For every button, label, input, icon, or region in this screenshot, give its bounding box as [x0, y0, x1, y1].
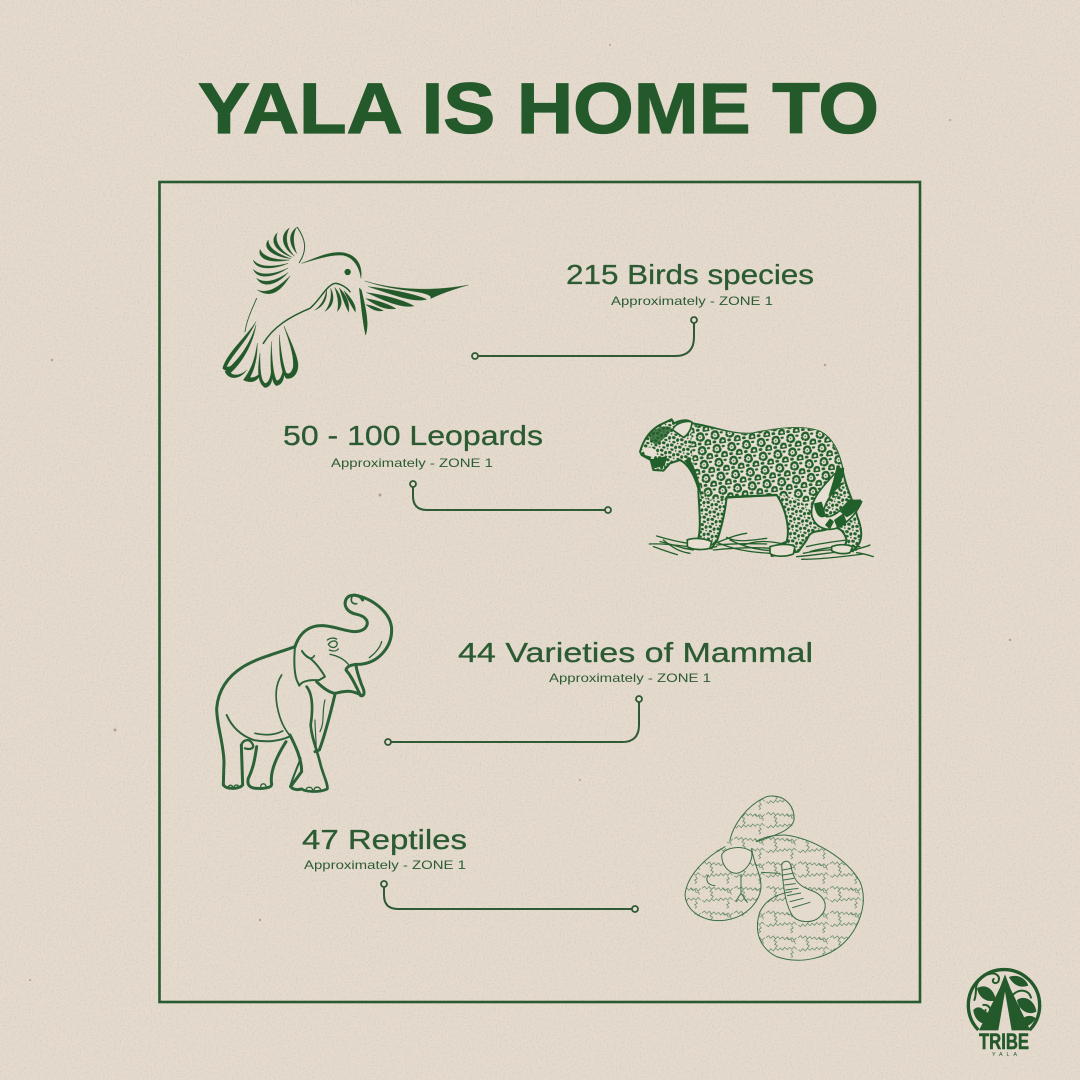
snake tongue and rattle — [736, 868, 810, 908]
head and back — [302, 252, 361, 278]
connector: mammals — [385, 696, 642, 745]
back legs — [241, 740, 253, 749]
grass — [649, 533, 873, 559]
lower wing — [263, 283, 350, 343]
leopard rosettes — [691, 425, 844, 514]
label: birds — [566, 259, 814, 308]
leopard ear — [673, 421, 692, 437]
label: mammals — [458, 637, 813, 685]
leopard torso — [691, 425, 844, 513]
chest folds — [315, 700, 325, 752]
label: leopards — [283, 420, 543, 470]
leopard base silhouette — [640, 419, 861, 556]
leopard head markings — [642, 426, 672, 468]
upper wing feathers — [253, 227, 297, 294]
mammals count: 44 Varieties of Mammal — [458, 637, 813, 668]
title: YALA IS HOME TO — [198, 70, 879, 149]
belly line — [727, 495, 777, 497]
logo subtitle: YALA — [992, 1052, 1017, 1058]
trunk outer — [354, 595, 392, 664]
birds note: Approximately - ZONE 1 — [611, 294, 773, 308]
wing outer edge — [297, 227, 305, 263]
logo: Tribe Yala — [968, 970, 1040, 1058]
leopards note: Approximately - ZONE 1 — [331, 456, 493, 470]
birds count: 215 Birds species — [566, 259, 814, 290]
paws — [687, 538, 853, 556]
content frame — [160, 182, 920, 1002]
label: reptiles — [302, 824, 467, 872]
back and head — [217, 647, 295, 788]
icon: hummingbird — [223, 227, 468, 388]
logo wordmark: TRIBE — [979, 1029, 1029, 1054]
snake outlines — [685, 796, 863, 960]
beak — [359, 288, 367, 335]
head top and trunk — [295, 595, 367, 647]
reptiles count: 47 Reptiles — [302, 824, 467, 855]
leopard small spots on head, neck and legs — [641, 420, 860, 552]
chest and front leg — [315, 694, 335, 752]
muzzle — [643, 447, 657, 457]
ear — [294, 647, 325, 686]
chest shadow — [685, 457, 702, 500]
mouth — [346, 664, 364, 696]
mammals note: Approximately - ZONE 1 — [549, 671, 711, 685]
connector: reptiles — [381, 881, 638, 912]
leopard tail — [812, 468, 862, 529]
icon: elephant — [217, 595, 392, 791]
eye — [327, 638, 338, 651]
tail feathers — [223, 322, 298, 388]
connector: birds — [472, 317, 697, 359]
leopards count: 50 - 100 Leopards — [283, 420, 543, 451]
rattle coil fill — [782, 861, 825, 922]
snake head fill — [722, 848, 752, 873]
icon: leopard — [637, 417, 873, 560]
body line — [245, 298, 257, 332]
toes — [228, 784, 321, 790]
logo emblem — [968, 970, 1040, 1030]
eye — [344, 269, 351, 275]
snake scale texture — [685, 796, 863, 960]
reptiles note: Approximately - ZONE 1 — [304, 858, 466, 872]
icon: snake — [684, 796, 864, 961]
right wing — [365, 281, 468, 311]
belly — [227, 715, 289, 741]
connector: leopards — [410, 481, 611, 513]
